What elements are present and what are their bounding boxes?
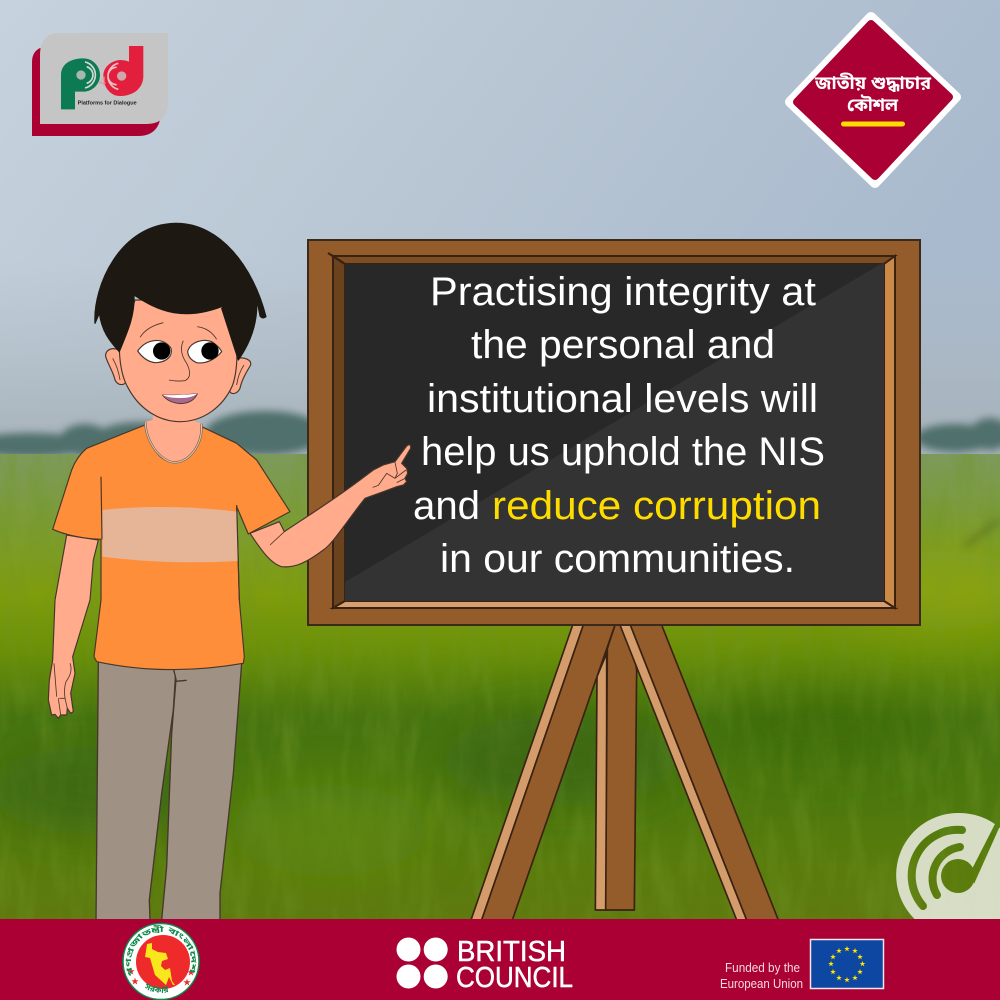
neck and necklace (145, 410, 202, 462)
British Council logo: COUNCIL (456, 962, 573, 994)
ears (106, 349, 126, 385)
left eye (138, 340, 171, 363)
chalkboard message: reduce corruption (492, 484, 821, 528)
chalkboard message: and (413, 484, 480, 528)
government seal (122, 922, 200, 1000)
badge underline (841, 122, 905, 126)
shirt band (102, 507, 238, 562)
badge: national integrity strategy: কৌশল (847, 95, 898, 119)
EU flag: ★ (844, 946, 850, 953)
EU flag: ★ (836, 948, 842, 955)
EU flag: ★ (830, 969, 836, 976)
EU flag: ★ (859, 961, 866, 968)
p4d mark: 4 (99, 74, 106, 89)
EU flag: ★ (836, 975, 842, 982)
EU flag: ★ (857, 969, 863, 976)
centre leg (595, 653, 607, 910)
eyebrows (140, 323, 217, 339)
government seal: সরকার (145, 983, 168, 993)
frame inner top bevel (333, 256, 895, 264)
face (119, 300, 237, 422)
right eye (188, 340, 222, 363)
funded by text: Funded by the (725, 961, 800, 975)
EU flag: ★ (828, 961, 834, 968)
chalkboard message: in our communities. (440, 537, 795, 581)
orange shirt (53, 425, 290, 670)
badge text: জাতীয় শুদ্ধাচার (814, 73, 932, 97)
EU flag: ★ (857, 954, 863, 961)
chalkboard surface (345, 264, 884, 601)
chalkboard message (413, 270, 825, 581)
chalkboard frame (308, 240, 920, 625)
badge: national integrity strategy (790, 17, 956, 183)
p4d mark: Platforms for Dialogue (78, 101, 137, 107)
EU flag (810, 940, 884, 988)
left leg (471, 625, 583, 920)
chalkboard message: Practising integrity at (430, 270, 816, 314)
frame inner left bevel (333, 256, 345, 608)
seal stars: ★ (187, 968, 195, 977)
frame inner right bevel (884, 256, 895, 608)
seal lettering: গণপ্রজাতন্ত্রী বাংলাদেশ (126, 925, 196, 976)
logo card (40, 33, 168, 124)
funded by text (720, 961, 803, 991)
frame inner bottom bevel (333, 601, 895, 608)
logo: Platforms for Dialogue (32, 33, 168, 136)
footer bar (0, 919, 1000, 1000)
funded by text: European Union (720, 977, 803, 991)
p4d mark (61, 46, 143, 109)
watermark: music note logo (896, 813, 1000, 919)
mouth (162, 394, 197, 404)
character: boy pointing at the board (48, 223, 411, 920)
left arm and hand (48, 535, 98, 718)
seal stars: ★ (127, 967, 135, 976)
nose (169, 341, 190, 381)
chalkboard message: help us uphold the NIS (421, 430, 825, 474)
British Council logo: BRITISH (457, 936, 566, 968)
trousers (96, 662, 242, 920)
EU flag: ★ (852, 975, 858, 982)
EU flag: ★ (852, 948, 858, 955)
chalkboard message: institutional levels will (427, 377, 818, 421)
chalkboard message: the personal and (471, 323, 775, 367)
map of Bangladesh (145, 943, 175, 985)
upper body and head (53, 223, 411, 670)
EU flag: ★ (830, 954, 836, 961)
seal stars (127, 967, 195, 987)
right leg (620, 625, 747, 920)
hair (95, 223, 266, 360)
right arm pointing (250, 445, 411, 567)
seal stars: ★ (131, 977, 139, 986)
British Council logo (396, 936, 573, 994)
logo shadow (32, 48, 160, 136)
seal stars: ★ (183, 978, 191, 987)
easel legs (471, 625, 778, 920)
EU flag: ★ (844, 977, 850, 984)
